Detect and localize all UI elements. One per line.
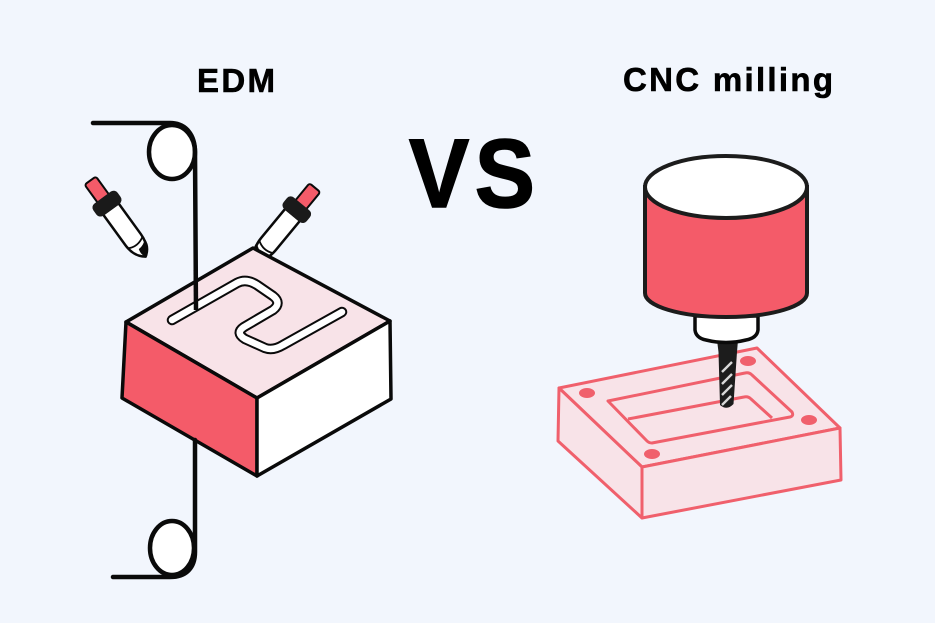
block right face xyxy=(257,321,391,476)
icon: left nozzle xyxy=(78,172,158,266)
plate right face xyxy=(642,428,841,518)
icon: lower wire pulley xyxy=(113,440,195,577)
block left face xyxy=(122,322,257,476)
workpiece plate xyxy=(558,348,841,518)
spindle collar xyxy=(695,316,758,342)
cylinder top xyxy=(645,156,807,218)
CNC milling illustration xyxy=(558,156,841,518)
spindle cylinder xyxy=(645,156,807,317)
icon: end mill bit xyxy=(717,340,738,408)
plate top face xyxy=(559,348,840,467)
cylinder body xyxy=(645,187,807,317)
icon: upper wire pulley xyxy=(93,123,196,310)
heading: VS: VS xyxy=(409,119,535,228)
cut slot xyxy=(172,281,342,349)
plate left face xyxy=(558,388,642,518)
workpiece block xyxy=(122,248,391,476)
milled pocket outline xyxy=(608,373,793,443)
mounting holes xyxy=(579,356,817,459)
icon: right nozzle xyxy=(243,178,326,271)
heading: EDM: EDM xyxy=(197,62,275,99)
pocket inner edge xyxy=(628,397,772,419)
EDM illustration xyxy=(78,123,391,577)
block top face xyxy=(126,248,390,398)
wire entering slot xyxy=(193,270,198,310)
heading: CNC milling: CNC milling xyxy=(623,61,833,98)
